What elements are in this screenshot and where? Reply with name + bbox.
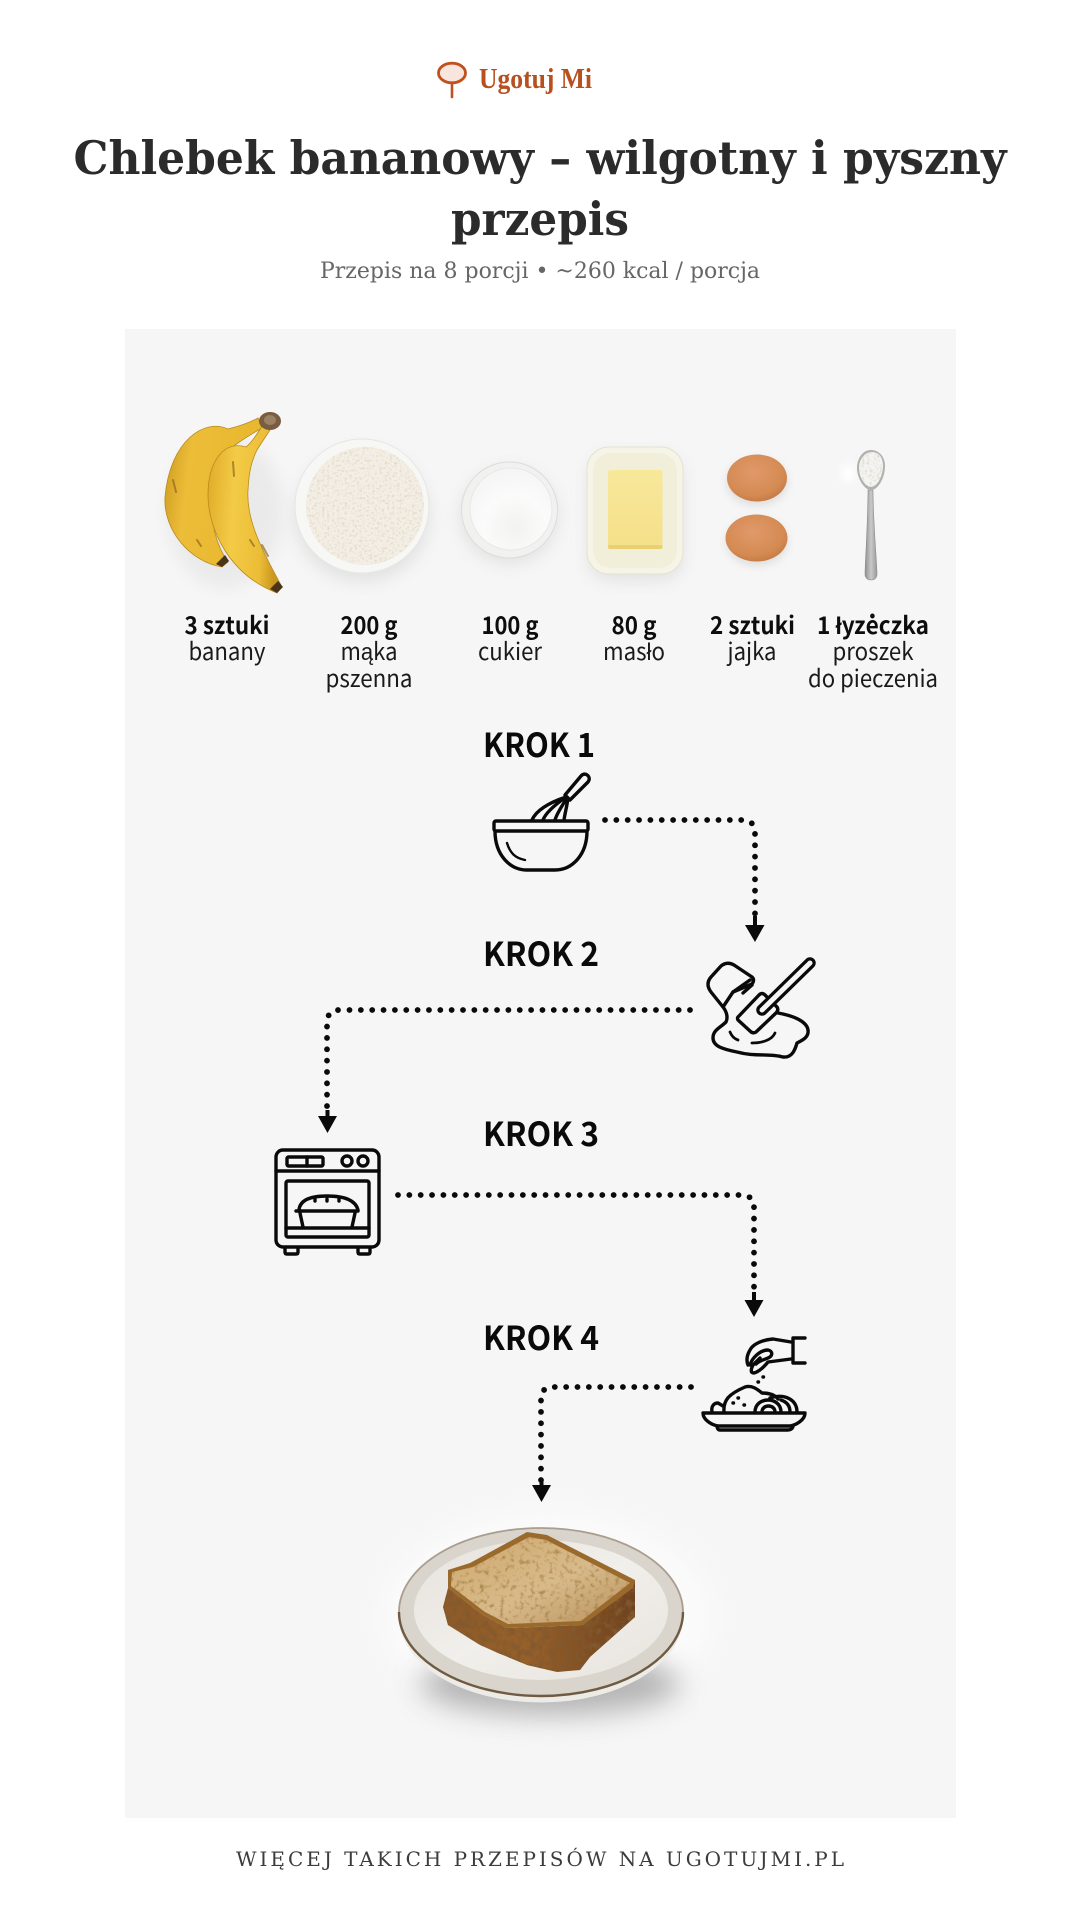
ingredient: butter on dish: [587, 447, 683, 581]
label: sugar: [478, 606, 543, 667]
photo: banana bread slice on a plate: [383, 1511, 713, 1721]
label: baking powder: proszek: [832, 632, 914, 667]
title: Chlebek bananowy – wilgotny i pyszny: [74, 131, 1008, 185]
label: flour: 200 g: [340, 606, 398, 641]
heading: KROK 1: KROK 1: [483, 719, 595, 767]
ingredient: flour bowl: [294, 439, 430, 582]
heading: KROK 2: KROK 2: [483, 928, 599, 976]
panel background: [125, 329, 956, 1818]
label: bananas: 3 sztuki: [184, 606, 270, 641]
arrow: step 1 to step 2: [605, 820, 764, 942]
label: butter: 80 g: [612, 606, 656, 641]
label: flour: pszenna: [326, 659, 412, 694]
label: sugar: cukier: [478, 632, 543, 667]
label: butter: masło: [603, 632, 665, 667]
arrow: step 4 to finished bread: [532, 1387, 691, 1502]
icon: hand seasoning a plate: [703, 1338, 805, 1430]
logo wordmark: Ugotuj Mi: [479, 63, 592, 95]
heading: KROK 3: KROK 3: [483, 1108, 599, 1156]
label: baking powder: [808, 606, 938, 694]
icon: pouring and mixing batter: [708, 963, 810, 1057]
ingredient: sugar bowl: [460, 462, 558, 564]
label: flour: [326, 606, 412, 694]
panel: recipe infographic: [125, 329, 956, 1818]
heading: KROK 4: KROK 4: [483, 1312, 599, 1360]
arrow: step 2 to step 3: [318, 1010, 690, 1133]
label: bananas: [184, 606, 270, 667]
label: flour: mąka: [340, 632, 398, 667]
title: przepis: [451, 192, 629, 246]
subtitle: Przepis na 8 porcji • ~260 kcal / porcja: [320, 259, 760, 284]
ingredient: bananas: [165, 412, 283, 593]
icon: logo spoon: [438, 63, 466, 97]
label: eggs: [710, 606, 795, 667]
logo: Ugotuj Mi: [438, 63, 592, 97]
label: eggs: jajka: [726, 632, 776, 667]
arrow: step 3 to step 4: [398, 1195, 764, 1317]
ingredient: eggs: [726, 454, 788, 566]
label: baking powder: 1 łyżeczka: [817, 606, 929, 641]
label: butter: [603, 606, 665, 667]
label: sugar: 100 g: [482, 606, 538, 641]
footer: WIĘCEJ TAKICH PRZEPISÓW NA UGOTUJMI.PL: [236, 1846, 844, 1871]
title: [74, 131, 1008, 246]
label: baking powder: do pieczenia: [808, 659, 938, 694]
label: eggs: 2 sztuki: [710, 606, 795, 641]
label: bananas: banany: [188, 632, 266, 667]
icon: bowl with whisk: [494, 774, 589, 870]
ingredient: baking powder spoon: [841, 450, 885, 580]
icon: oven with loaf: [276, 1150, 379, 1254]
